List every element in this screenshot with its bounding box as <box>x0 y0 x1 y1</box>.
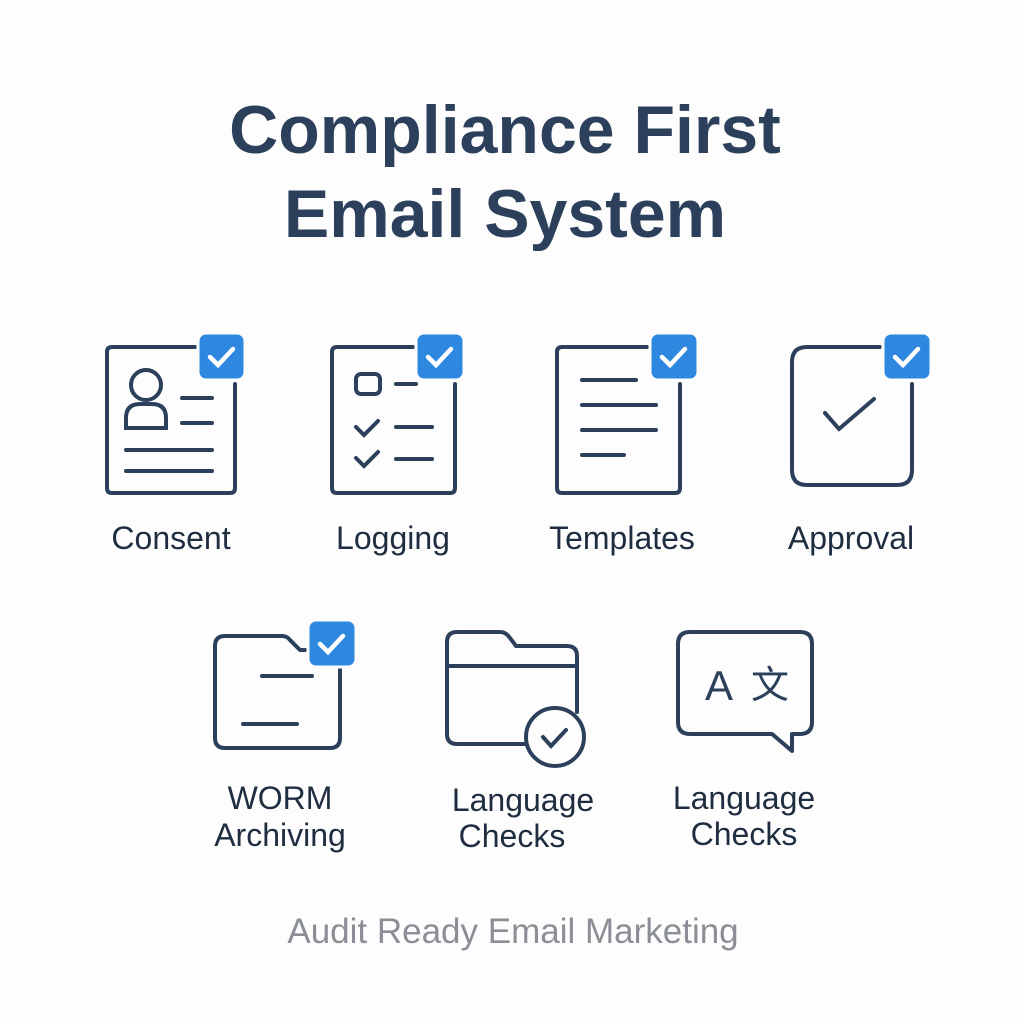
label: templates: Templates <box>549 520 695 556</box>
footer: Audit Ready Email Marketing <box>287 912 739 951</box>
label: consent: Consent <box>111 520 231 556</box>
icon: translation bubble: A <box>705 662 733 709</box>
label: language checks 1 <box>452 782 594 854</box>
title: Email System <box>284 176 726 252</box>
label: language checks 2: Checks <box>691 816 797 852</box>
label: logging: Logging <box>336 520 450 556</box>
label: language checks 1: Checks <box>459 818 565 854</box>
title: Compliance First <box>229 92 781 168</box>
label: language checks 2: Language <box>673 780 815 816</box>
icon: templates <box>557 333 698 493</box>
icon: logging <box>332 333 464 493</box>
icon: worm archiving <box>215 620 356 748</box>
badge <box>198 333 245 380</box>
label: worm archiving <box>214 780 346 853</box>
icon: translation bubble <box>678 632 812 751</box>
icon: approval <box>792 333 931 485</box>
icon: folder check <box>447 632 584 766</box>
label: approval: Approval <box>788 520 914 556</box>
icon: translation bubble: 文 <box>751 654 789 709</box>
icon: consent <box>107 333 245 493</box>
title <box>229 92 781 252</box>
label: language checks 1: Language <box>452 782 594 818</box>
label: worm archiving: Archiving <box>214 817 346 853</box>
label: language checks 2 <box>673 780 815 852</box>
label: worm archiving: WORM <box>228 780 332 816</box>
